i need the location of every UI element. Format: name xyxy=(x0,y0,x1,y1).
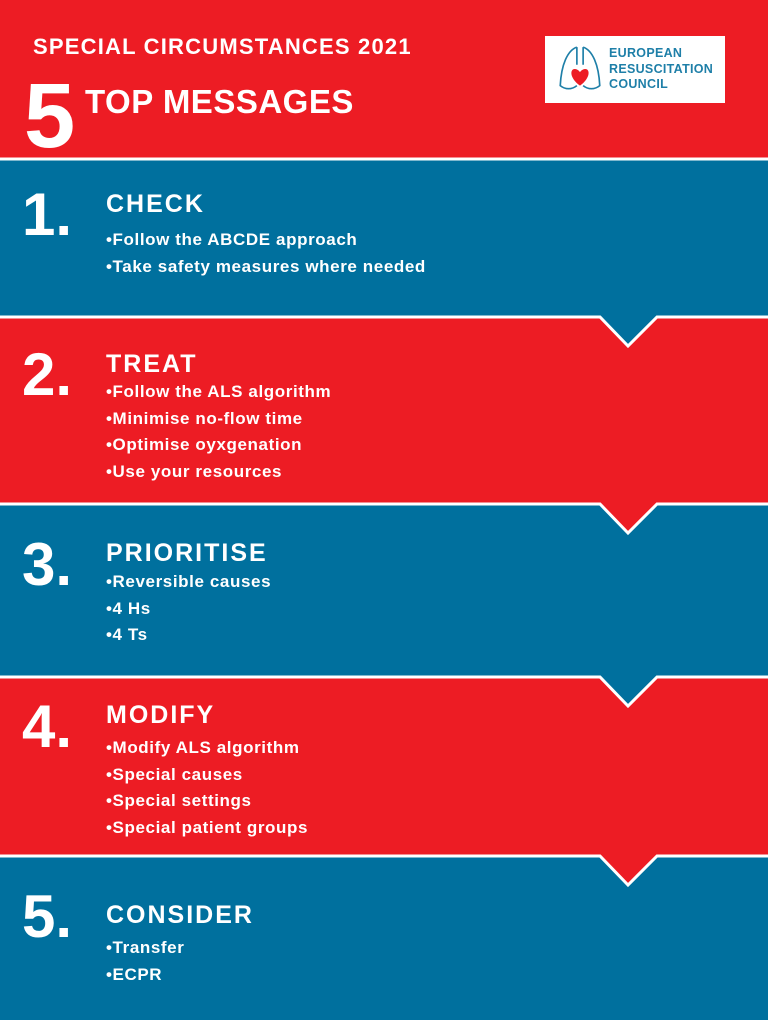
step 3: •4 Ts xyxy=(106,625,148,644)
step 2: •Optimise oyxgenation xyxy=(106,435,302,454)
step 3 xyxy=(22,531,271,644)
logo xyxy=(545,36,725,103)
step 2: •Follow the ALS algorithm xyxy=(106,382,331,401)
header title: SPECIAL CIRCUMSTANCES 2021 xyxy=(33,34,412,59)
step 2: •Minimise no-flow time xyxy=(106,408,303,428)
logo text: COUNCIL xyxy=(609,77,668,91)
step 4: MODIFY xyxy=(106,701,215,729)
big number 5: 5 xyxy=(24,65,75,167)
step 2 xyxy=(22,341,331,480)
logo text: EUROPEAN xyxy=(609,46,682,60)
step 4: 4. xyxy=(22,693,72,760)
step 1 xyxy=(22,181,426,276)
step 5: CONSIDER xyxy=(106,901,254,929)
step 1: •Take safety measures where needed xyxy=(106,256,426,276)
step 3: 3. xyxy=(22,531,72,598)
step 4 xyxy=(22,693,308,836)
step 3: PRIORITISE xyxy=(106,539,268,567)
step 5: •Transfer xyxy=(106,938,184,957)
icon: lungs heart xyxy=(559,46,601,90)
step 5: •ECPR xyxy=(106,964,162,984)
logo text xyxy=(609,46,713,91)
subtitle: TOP MESSAGES xyxy=(85,83,354,120)
step 2: TREAT xyxy=(106,350,197,378)
step 4: •Special settings xyxy=(106,791,252,810)
step 1: •Follow the ABCDE approach xyxy=(106,230,357,249)
step 4: •Modify ALS algorithm xyxy=(106,738,300,757)
step 5: 5. xyxy=(22,883,72,950)
step 1: 1. xyxy=(22,181,72,248)
step 2: •Use your resources xyxy=(106,462,282,480)
step 3: •Reversible causes xyxy=(106,572,271,591)
step 4: •Special causes xyxy=(106,764,243,784)
step 2: 2. xyxy=(22,341,72,408)
step 3: •4 Hs xyxy=(106,598,151,618)
step 1: CHECK xyxy=(106,190,205,218)
step 5 xyxy=(22,883,254,984)
logo text: RESUSCITATION xyxy=(609,62,713,76)
step 4: •Special patient groups xyxy=(106,818,308,836)
